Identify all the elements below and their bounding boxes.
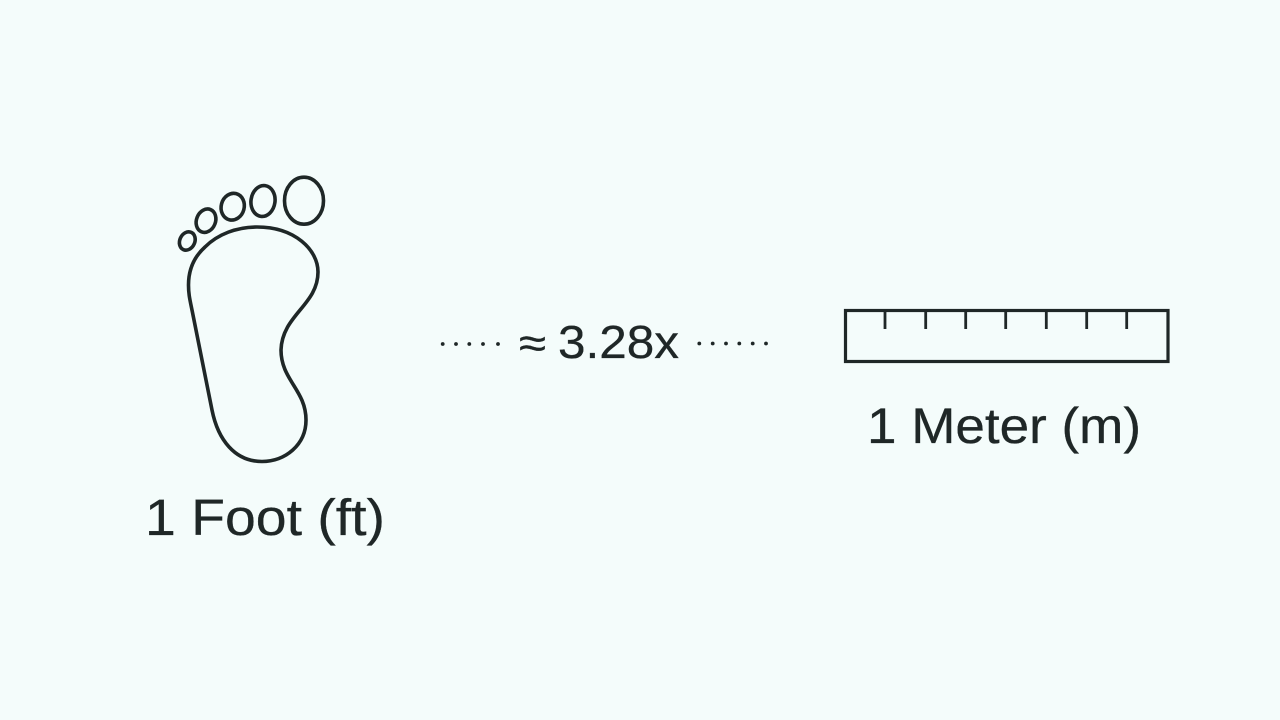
big toe (284, 177, 324, 224)
panel: conversion factor (441, 316, 768, 368)
icon: footprint (176, 177, 324, 461)
fifth toe (176, 229, 198, 253)
conversion value: 3.28x (558, 316, 679, 368)
label: 1 Meter (m): 1 Meter (m) (867, 398, 1141, 454)
second toe (249, 184, 277, 218)
fourth toe (193, 206, 219, 235)
ruler ticks (885, 311, 1127, 329)
foot sole outline (188, 227, 318, 462)
conversion approx symbol: ≈ (519, 319, 546, 368)
dotted line left (441, 342, 500, 346)
third toe (218, 191, 247, 223)
icon: ruler (846, 310, 1168, 362)
ruler body (846, 310, 1168, 362)
label: 1 Foot (ft): 1 Foot (ft) (145, 489, 385, 546)
dotted line right (697, 342, 768, 345)
panel: foot (145, 177, 385, 546)
panel: meter (846, 310, 1168, 454)
